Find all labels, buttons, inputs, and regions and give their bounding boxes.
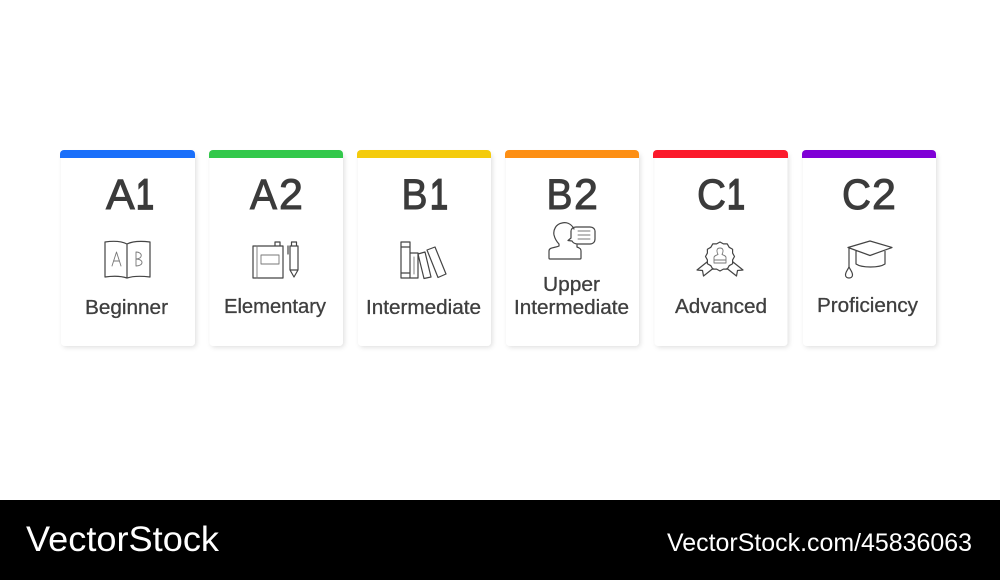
- heading: C1: C: [697, 171, 726, 219]
- heading: C2: 2: [872, 171, 896, 219]
- label: Upper Intermediate: Intermediate: [514, 297, 629, 319]
- purple top bar: [802, 150, 936, 158]
- label: Proficiency: Proficiency: [817, 295, 918, 317]
- yellow top bar: [357, 150, 491, 158]
- heading: A1: 1: [136, 171, 154, 219]
- label: Intermediate: Intermediate: [366, 297, 481, 319]
- brand name: VectorStock: VectorStock: [26, 520, 220, 559]
- blue top bar: [60, 150, 195, 158]
- label: Upper Intermediate: [514, 274, 629, 319]
- heading: B1: 1: [430, 171, 448, 219]
- heading: A2: A: [250, 171, 277, 219]
- icon: open book with A and B: [105, 241, 150, 278]
- heading: B1: [402, 171, 448, 219]
- panel: A1 Beginner card: [60, 150, 195, 346]
- red top bar: [653, 150, 788, 158]
- panel: C2 Proficiency card: [802, 150, 936, 346]
- label: Upper Intermediate: Upper: [543, 274, 600, 296]
- green top bar: [209, 150, 343, 158]
- heading: B2: 2: [574, 171, 598, 219]
- icon: notebook and pen: [253, 242, 298, 278]
- heading: B1: B: [402, 171, 428, 219]
- icon: leaning books: [401, 242, 446, 278]
- footer band: [0, 500, 1000, 580]
- label: Advanced: Advanced: [675, 296, 767, 318]
- icon: graduation cap with tassel: [846, 241, 892, 278]
- heading: A2: [250, 171, 303, 219]
- label: Beginner: Beginner: [85, 297, 168, 319]
- panel: A2 Elementary card: [209, 150, 343, 346]
- heading: C2: C: [842, 171, 871, 219]
- orange top bar: [505, 150, 639, 158]
- heading: C1: [697, 171, 745, 219]
- heading: C2: [842, 171, 896, 219]
- panel: B1 Intermediate card: [357, 150, 491, 346]
- image id: VectorStock.com/45836063: VectorStock.com/45836063: [667, 529, 972, 557]
- heading: B2: [546, 171, 598, 219]
- heading: A1: A: [106, 171, 135, 219]
- heading: C1: 1: [727, 171, 745, 219]
- panel: B2 Upper Intermediate card: [505, 150, 639, 346]
- heading: B2: B: [546, 171, 572, 219]
- icon: award rosette: [697, 242, 743, 276]
- icon: person with speech bubble: [549, 223, 595, 259]
- heading: A2: 2: [279, 171, 303, 219]
- panel: C1 Advanced card: [653, 150, 788, 346]
- label: Elementary: Elementary: [224, 296, 326, 318]
- heading: A1: [106, 171, 154, 219]
